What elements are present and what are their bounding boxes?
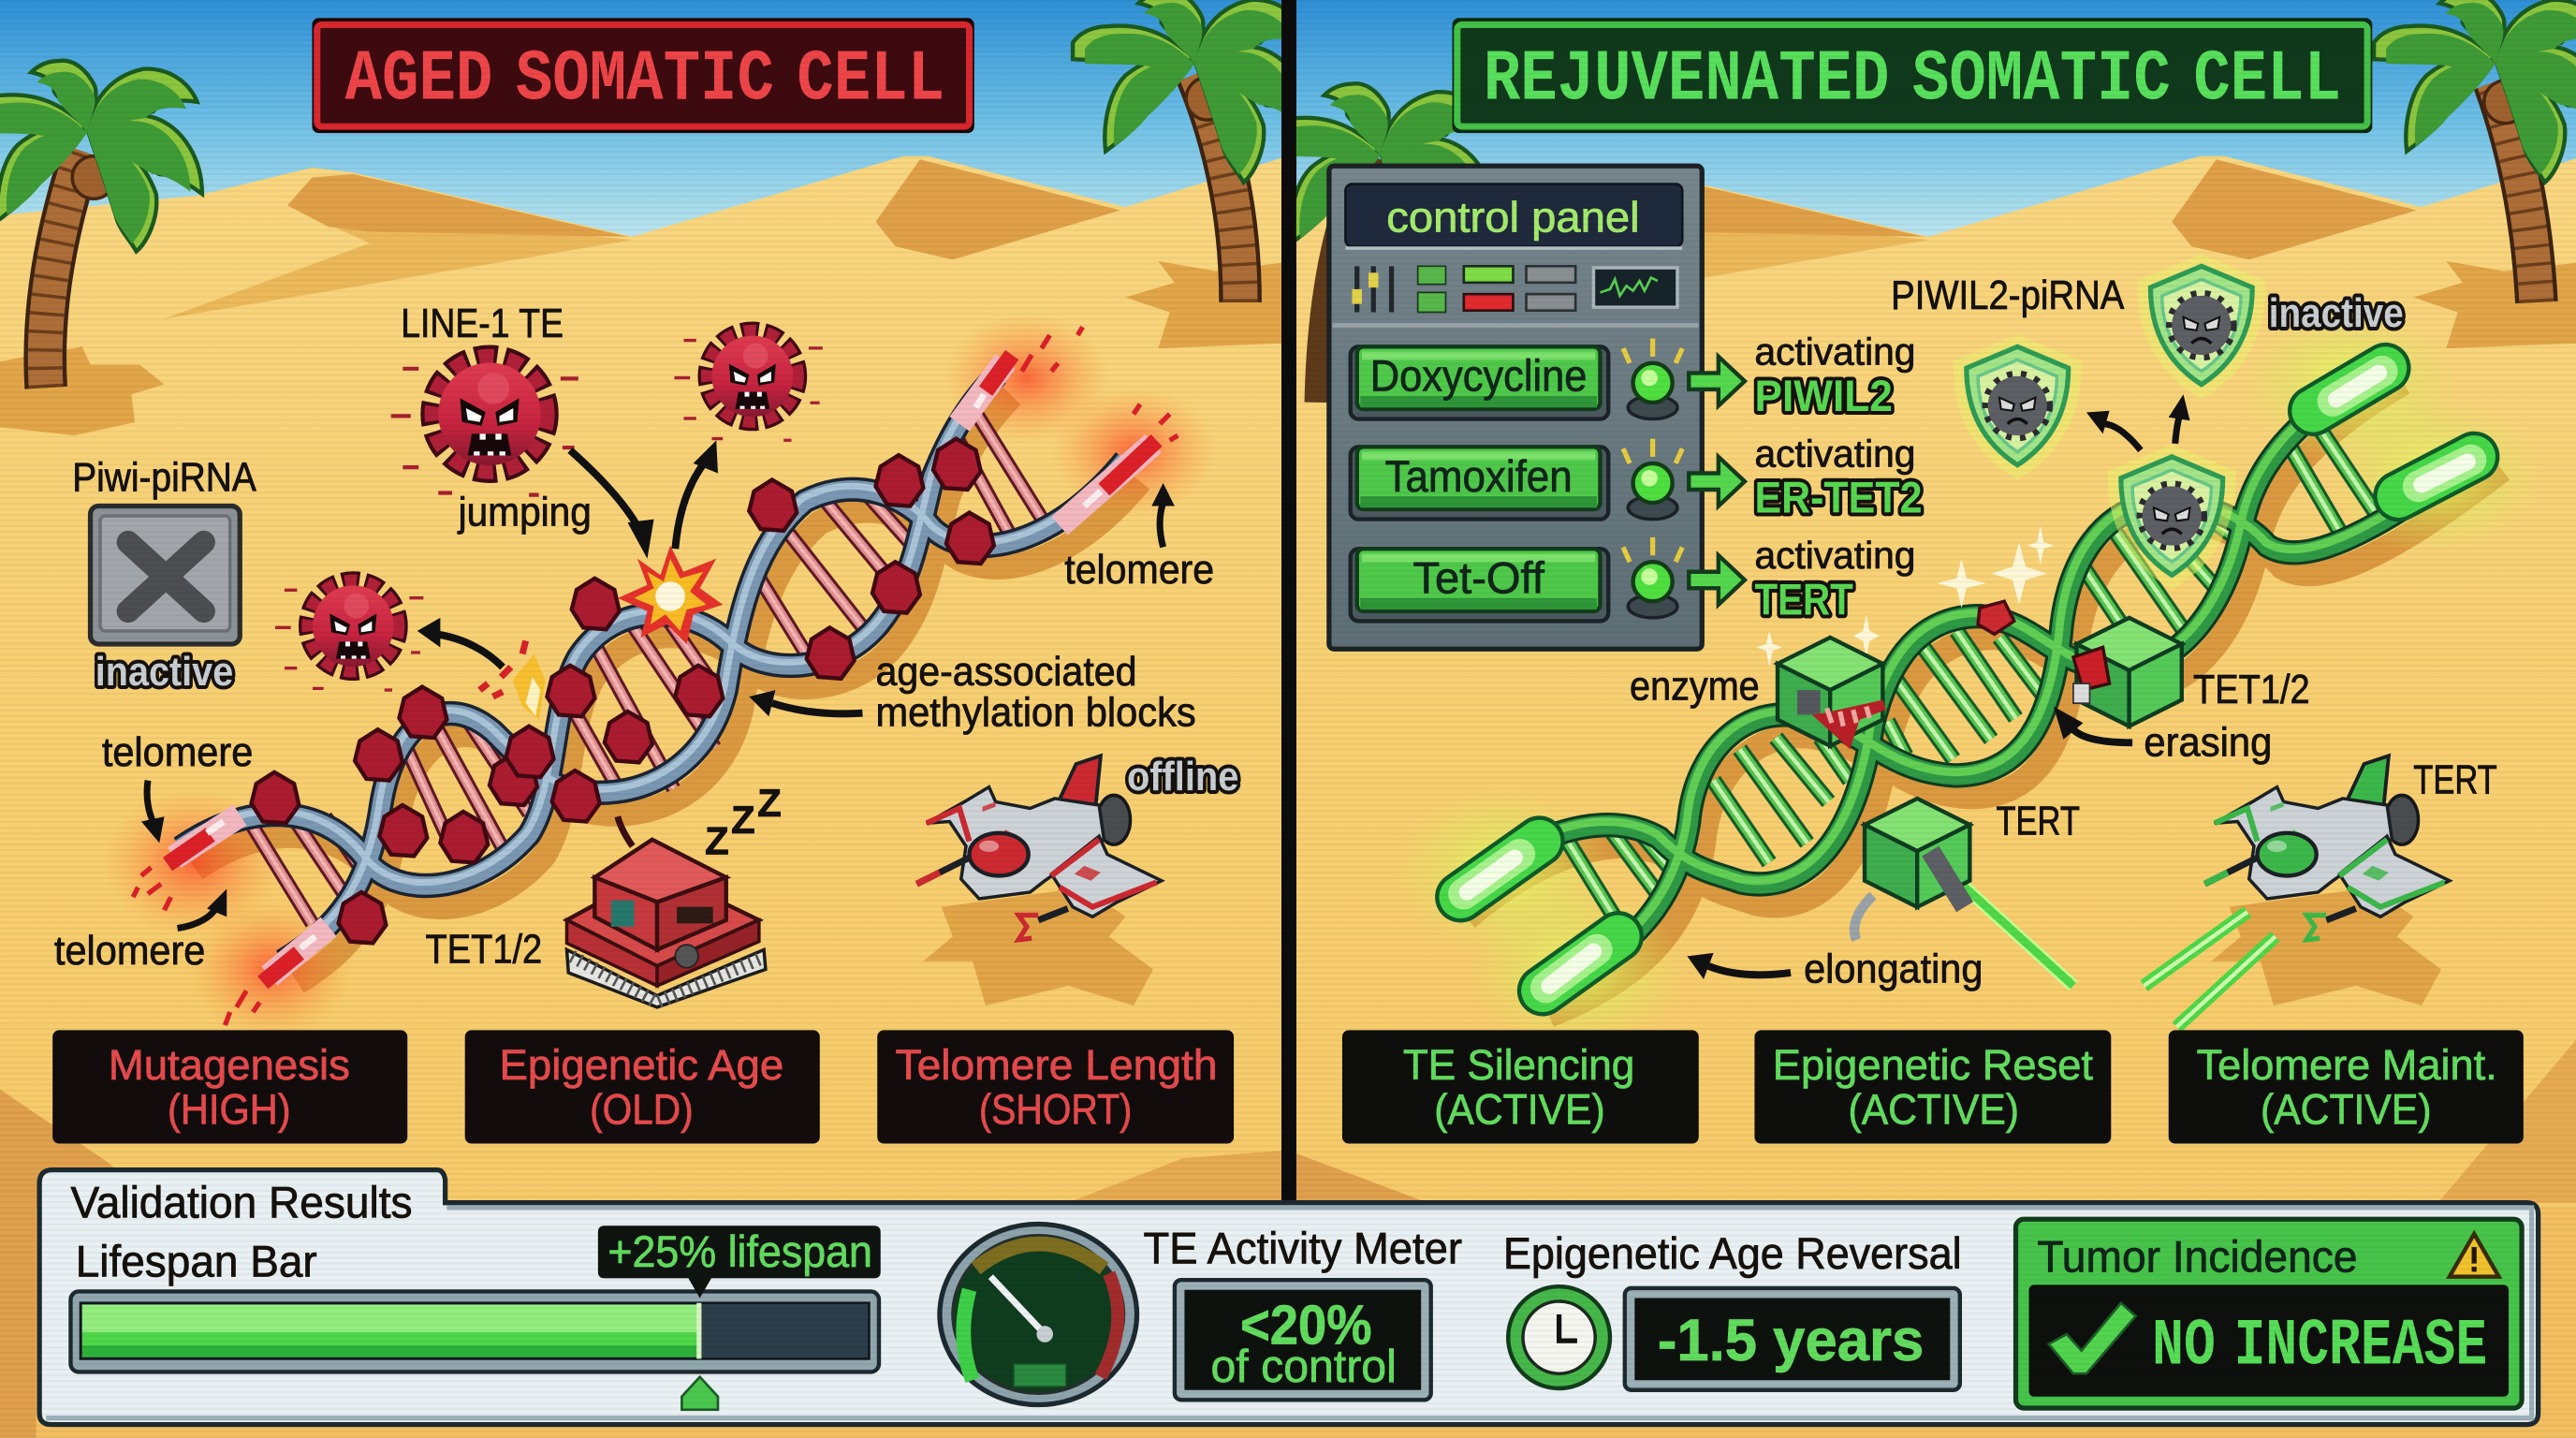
arrow: to PIWIL2 [1689,357,1745,405]
status box: epigenetic age: (OLD) [590,1085,694,1133]
status box: telomere maintenance: (ACTIVE) [2261,1085,2432,1133]
palm shadow: left [0,346,165,435]
status box: epigenetic reset: Epigenetic Reset [1773,1041,2093,1089]
arrow: telomere top right [1151,483,1175,547]
sand below validation panel [0,1208,2576,1438]
button: doxycycline: Doxycycline [1370,352,1587,402]
text labels: rejuvenated panel: TERT [1754,575,1853,624]
button: doxycycline [1351,346,1608,419]
background: left desert panel [0,0,1281,1208]
status box: mutagenesis: (HIGH) [168,1085,291,1133]
arrow: jumping out left [417,618,503,668]
arrow: telomere lower [141,781,165,843]
status box: telomere length [877,1030,1234,1143]
status box: telomere length: (SHORT) [979,1085,1132,1133]
palm shadow: right [1125,261,1281,348]
panel: aged DNA scene [104,312,1216,1038]
status box: TE silencing [1342,1030,1699,1143]
title: rejuvenated somatic cell: REJUVENATED SOMATIC CELL [1484,39,2341,121]
panel: rejuvenated DNA scene [1397,307,2541,1051]
text labels: rejuvenated panel: enzyme [1630,664,1760,710]
status box: epigenetic age [465,1030,820,1143]
sleep letter top: Z [757,781,782,825]
methylation blocks [252,439,994,943]
palm tree: right panel right [2374,0,2576,302]
text labels: rejuvenated panel: inactive [2269,290,2404,336]
status box: telomere maintenance [2169,1030,2524,1143]
text labels: aged panel: Piwi-piRNA [72,455,256,501]
text labels: aged panel: methylation blocks [875,690,1196,736]
status box: TE silencing: TE Silencing [1403,1041,1634,1089]
DNA strands [1451,359,2487,994]
panel: control panel [1329,166,1702,649]
shield: inactive virus top [2145,263,2258,389]
box: -1.5 years [1625,1288,1960,1390]
glowing telomere tubes [1460,368,2474,990]
LED: tet-off [1623,537,1682,618]
heading: Validation Results [70,1178,413,1227]
arrow: erasing [2054,707,2132,742]
status box: mutagenesis: Mutagenesis [109,1041,350,1089]
icon: clock [1508,1286,1610,1388]
panel: control panel: control panel [1386,193,1640,241]
text labels: rejuvenated panel: TERT [2413,757,2497,803]
button: tamoxifen [1351,447,1608,520]
gauge: TE activity meter [940,1224,1137,1405]
lifespan bar [70,1291,879,1372]
icon: LINE-1 virus large [391,363,578,497]
text labels: aged panel: age-associated [875,649,1137,695]
frayed telomere ends [133,327,1178,1025]
status box: TE silencing: (ACTIVE) [1434,1085,1605,1133]
text labels: aged panel: telomere [54,928,205,974]
DNA rungs [250,407,1051,923]
DNA shadow [196,396,1140,983]
explosion [479,546,723,720]
DNA shadow [1467,383,2502,1016]
text labels: rejuvenated panel: ER-TET2 [1754,474,1922,523]
palm tree: right panel left [1295,81,1481,403]
text labels: rejuvenated panel [1630,272,2497,992]
shield: inactive virus on DNA [2116,453,2228,580]
shield: inactive virus left [1962,344,2073,470]
box: tumor incidence: Tumor Incidence [2037,1232,2358,1282]
box: tumor incidence [2016,1219,2522,1408]
arrow: to ER-TET2 [1689,457,1745,506]
icon: LINE-1 virus upper [674,336,823,442]
icon: TERT ship with thrusters [2144,756,2450,1027]
LED: tamoxifen [1623,439,1682,520]
title: aged somatic cell [312,18,974,133]
palm tree: right [1071,0,1281,302]
icon: offline telomerase ship [916,756,1162,940]
icon: TERT laser box [1854,799,2073,986]
background: right desert panel [1295,0,2576,1208]
arrow: jumping in [570,450,654,559]
arrow: elongating [1687,953,1791,979]
status box: telomere maintenance: Telomere Maint. [2197,1041,2497,1089]
sleep letter small: Z [705,819,729,863]
arrow: to top shield [2169,394,2190,444]
LED: doxycycline [1623,339,1682,419]
text labels: rejuvenated panel: TET1/2 [2193,667,2310,712]
icon: LINE-1 virus left [275,585,423,692]
text labels: rejuvenated panel: erasing [2144,719,2272,765]
status box: telomere length: Telomere Length [896,1041,1218,1089]
ship shadow: aged [923,888,1153,1005]
lifespan marker [681,1377,718,1410]
status box: epigenetic reset [1754,1030,2111,1143]
epigenetic age label: Epigenetic Age Reversal [1503,1229,1962,1279]
red repaired mark [1978,601,2014,634]
arrow: to left shield [2086,411,2141,450]
indicator sliders and switches [1352,266,1677,312]
center divider [1281,0,1296,1208]
arrow: to TERT [1689,555,1745,605]
icon: warning [2450,1234,2499,1277]
status box: epigenetic age: Epigenetic Age [500,1041,783,1089]
box: under 20 percent of control [1175,1280,1431,1400]
badge: +25% lifespan: +25% lifespan [607,1227,872,1277]
box: under 20 percent of control: of control [1211,1342,1397,1392]
text labels: aged panel: telomere [1064,547,1214,593]
sand corner left [0,1208,37,1438]
button: tet-off: Tet-Off [1412,554,1545,604]
icon: check mark [2049,1303,2136,1373]
DNA strands [179,372,1125,961]
sleep letter middle: Z [731,798,755,842]
arrow: telomere bottom [178,888,227,929]
box: under 20 percent of control: <20% [1240,1294,1372,1357]
title: rejuvenated somatic cell [1453,18,2372,133]
icon: inactive piwi X box [91,506,240,644]
badge: +25% lifespan [598,1225,881,1298]
lifespan label: Lifespan Bar [76,1238,317,1287]
status box: mutagenesis [52,1030,407,1143]
text labels: rejuvenated panel: PIWIL2 [1754,372,1893,421]
text labels: aged panel [54,301,1238,974]
button: tamoxifen: Tamoxifen [1385,452,1573,502]
palm shadow: right panel [2413,261,2576,348]
icon: TET1/2 eraser box [2073,618,2182,726]
text labels: aged panel: offline [1127,754,1238,800]
text labels: aged panel: jumping [457,490,592,536]
button: tet-off [1351,549,1608,621]
text labels: rejuvenated panel: activating [1754,432,1915,475]
text labels: rejuvenated panel: elongating [1804,946,1983,992]
TE activity label: TE Activity Meter [1144,1225,1462,1274]
DNA rungs [1560,419,2382,936]
text labels: rejuvenated panel: TERT [1996,799,2080,844]
title: aged somatic cell: AGED SOMATIC CELL [345,39,944,121]
arrow: methylation blocks [749,690,862,716]
text labels: aged panel: LINE-1 TE [401,301,564,346]
palm tree: left [0,61,202,388]
text labels: rejuvenated panel: PIWIL2-piRNA [1891,272,2125,318]
text labels: aged panel: inactive [95,649,233,695]
tube glow [1397,307,2541,1051]
text labels: rejuvenated panel: activating [1754,330,1915,374]
arrow: jumping out up [675,440,718,549]
status box: epigenetic reset: (ACTIVE) [1848,1085,2019,1133]
icon: sleeping TET1/2 robot [567,816,766,1007]
panel: validation results [39,1170,2539,1425]
box: tumor incidence: NO INCREASE [2152,1311,2487,1385]
text labels: aged panel: telomere [102,729,253,775]
icon: enzyme box [1778,638,1886,749]
text labels: aged panel: TET1/2 [426,926,542,972]
text labels: rejuvenated panel: activating [1754,534,1915,577]
sparkles [1756,526,2054,668]
telomere glow [104,312,1216,1038]
ship shadow: rejuvenated [2211,888,2441,1005]
box: -1.5 years: -1.5 years [1658,1308,1924,1373]
